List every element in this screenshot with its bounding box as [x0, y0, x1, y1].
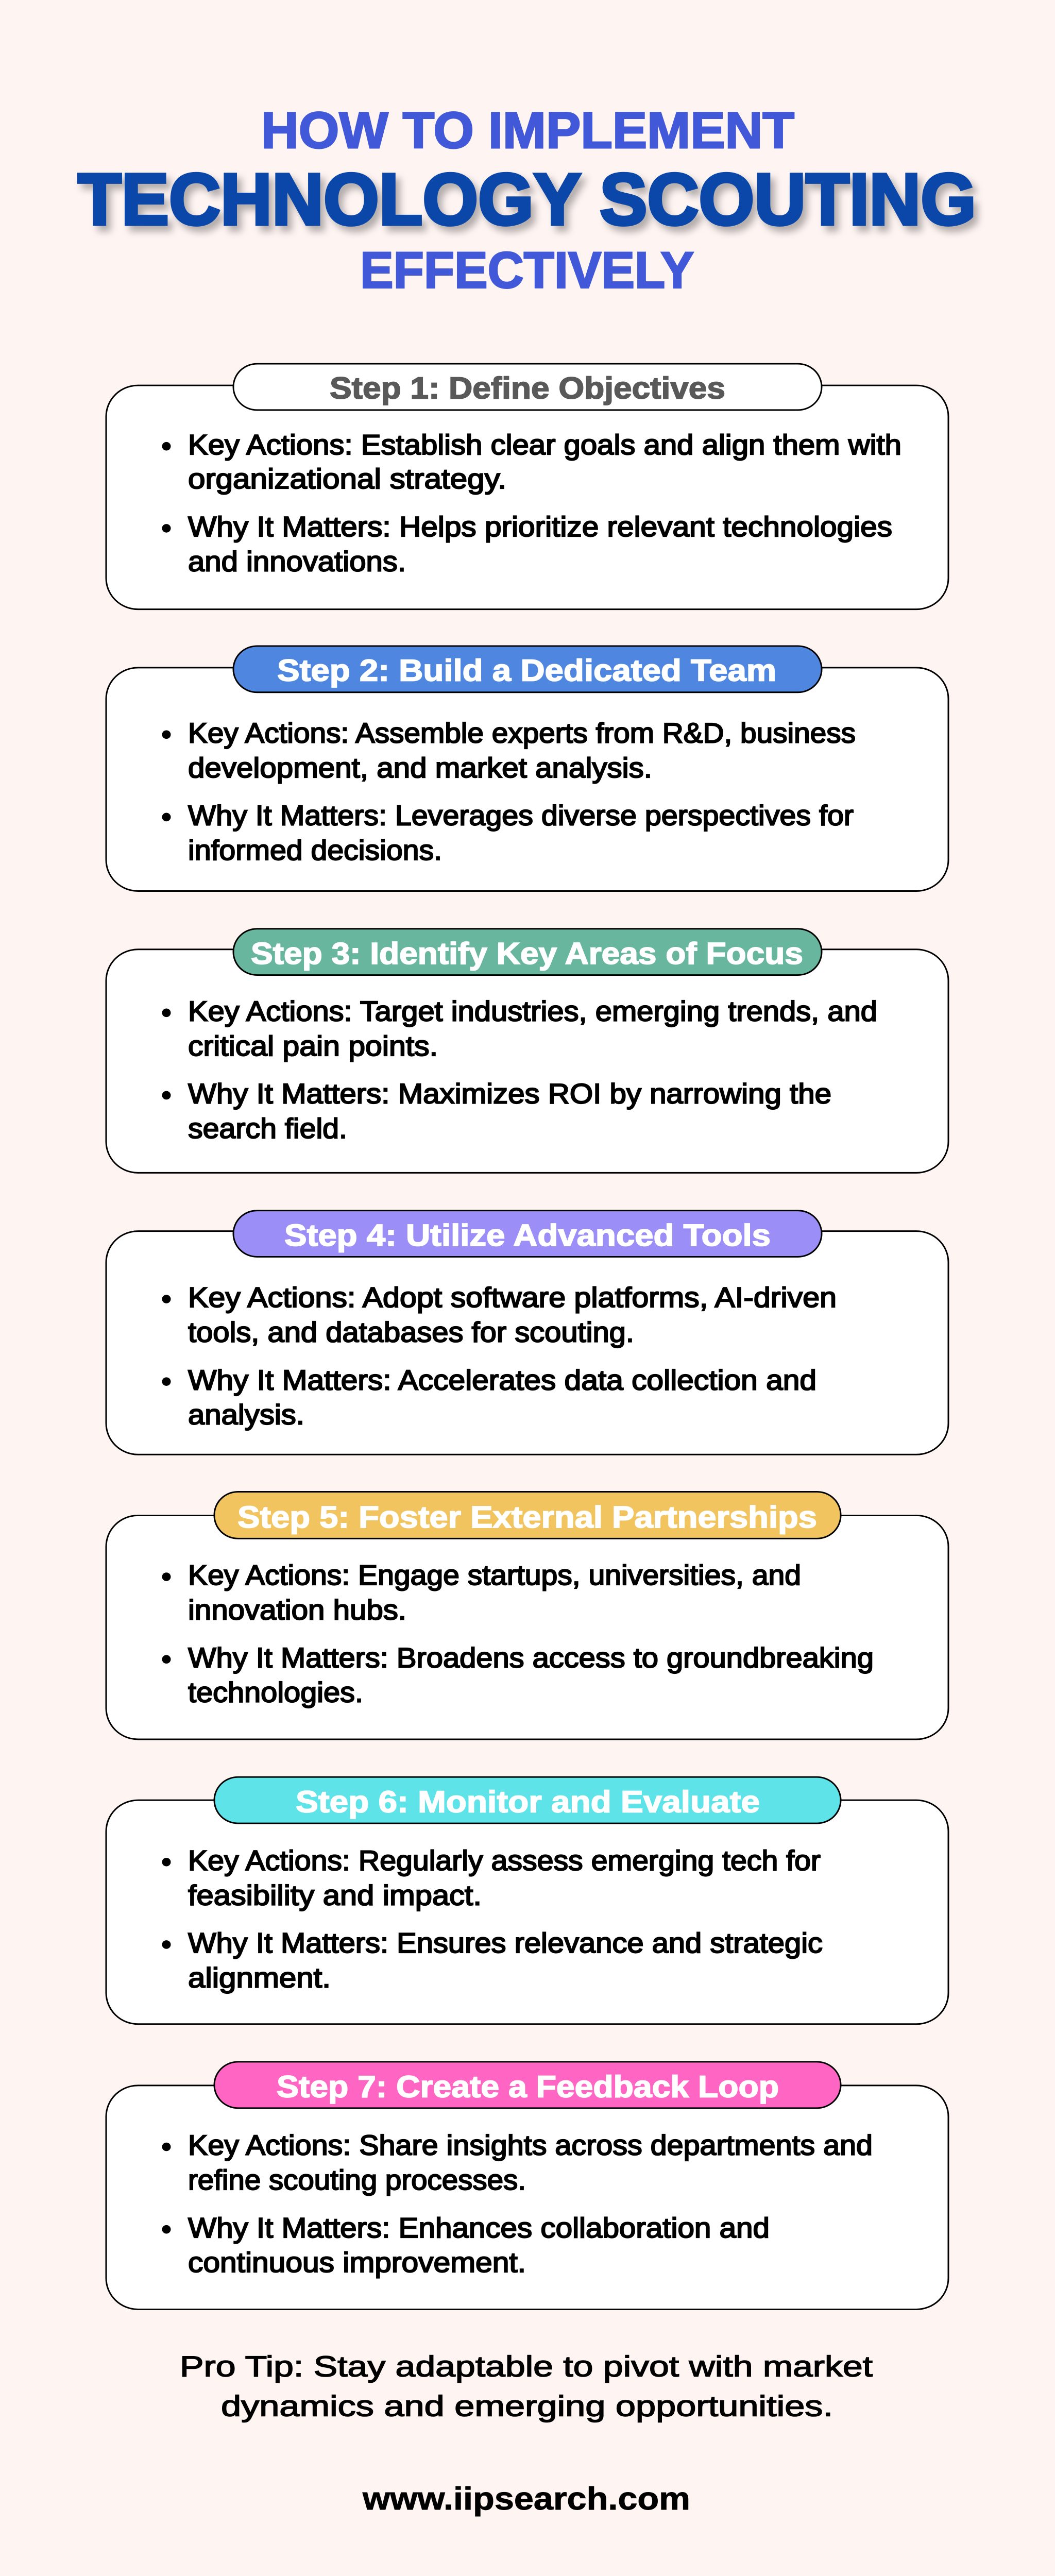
step 2 key actions — [162, 717, 856, 784]
step 2 why it matters: informed decisions. — [188, 835, 442, 866]
step 3 heading pill — [233, 929, 822, 975]
step 4 key actions: tools, and databases for scouting. — [188, 1316, 634, 1348]
step 6 why it matters: alignment. — [188, 1962, 331, 1993]
title line 2: TECHNOLOGY SCOUTING — [78, 159, 976, 240]
panel: step 3 — [106, 929, 948, 1173]
website: www.iipsearch.com — [362, 2481, 690, 2517]
step 2 why it matters: Why It Matters: Leverages diverse perspectives for — [188, 800, 854, 831]
step 4 heading: Step 4: Utilize Advanced Tools — [284, 1218, 771, 1252]
step 7 heading: Step 7: Create a Feedback Loop — [277, 2069, 779, 2104]
step 5 key actions: Key Actions: Engage startups, universities, and — [188, 1560, 801, 1591]
step 7 key actions: Key Actions: Share insights across departments and — [188, 2129, 873, 2161]
step 7 why it matters: continuous improvement. — [188, 2247, 526, 2278]
step 3 why it matters: search field. — [188, 1113, 347, 1144]
step 3 why it matters: Why It Matters: Maximizes ROI by narrowing the — [188, 1078, 831, 1109]
step 7 key actions — [162, 2129, 873, 2196]
step 4 why it matters: Why It Matters: Accelerates data collection and — [188, 1364, 816, 1396]
step 5 why it matters — [162, 1642, 874, 1708]
step 6 heading pill — [214, 1777, 841, 1823]
step 6 heading: Step 6: Monitor and Evaluate — [296, 1784, 760, 1819]
panel: step 7 — [106, 2062, 948, 2309]
step 2 key actions: development, and market analysis. — [188, 752, 652, 784]
step 6 key actions: feasibility and impact. — [188, 1879, 482, 1911]
step 2 key actions: Key Actions: Assemble experts from R&D, business — [188, 717, 856, 749]
step 2 why it matters — [162, 800, 854, 866]
step 4 why it matters — [162, 1364, 816, 1431]
step 6 why it matters: Why It Matters: Ensures relevance and strategic — [188, 1927, 823, 1959]
panel: step 2 — [106, 646, 948, 891]
step 1 why it matters: and innovations. — [188, 546, 406, 577]
step 1 key actions — [162, 429, 901, 495]
step 1 heading: Step 1: Define Objectives — [330, 370, 725, 405]
step 1 key actions: Key Actions: Establish clear goals and align them with — [188, 429, 901, 461]
step 4 heading pill — [233, 1211, 822, 1257]
step 6 key actions: Key Actions: Regularly assess emerging tech for — [188, 1844, 821, 1876]
step 1 heading pill — [233, 364, 822, 410]
step 5 key actions: innovation hubs. — [188, 1594, 406, 1625]
step 1 why it matters: Why It Matters: Helps prioritize relevant technologies — [188, 511, 892, 543]
step 7 why it matters: Why It Matters: Enhances collaboration and — [188, 2212, 770, 2244]
panel: step 1 — [106, 364, 948, 609]
step 5 heading pill — [214, 1492, 841, 1538]
step 5 heading: Step 5: Foster External Partnerships — [237, 1499, 817, 1534]
step 7 heading pill — [214, 2062, 841, 2108]
step 3 why it matters — [162, 1078, 831, 1144]
step 3 key actions: critical pain points. — [188, 1030, 438, 1062]
step 6 key actions — [162, 1844, 821, 1911]
step 1 key actions: organizational strategy. — [188, 463, 506, 495]
pro tip: dynamics and emerging opportunities. — [221, 2390, 833, 2422]
panel: step 5 — [106, 1492, 948, 1739]
step 2 heading pill — [233, 646, 822, 692]
step 3 heading: Step 3: Identify Key Areas of Focus — [251, 936, 803, 971]
step 3 key actions: Key Actions: Target industries, emerging trends, and — [188, 995, 877, 1027]
step 4 why it matters: analysis. — [188, 1399, 304, 1431]
step 5 why it matters: technologies. — [188, 1676, 363, 1708]
panel: step 6 — [106, 1777, 948, 2024]
step 4 key actions — [162, 1282, 837, 1348]
panel: step 4 — [106, 1211, 948, 1454]
step 2 heading: Step 2: Build a Dedicated Team — [277, 653, 776, 687]
step 1 why it matters — [162, 511, 892, 577]
step 3 key actions — [162, 995, 877, 1062]
step 6 why it matters — [162, 1927, 823, 1993]
step 7 key actions: refine scouting processes. — [188, 2164, 526, 2196]
title line 3: EFFECTIVELY — [360, 242, 694, 299]
pro tip — [180, 2350, 873, 2422]
pro tip: Pro Tip: Stay adaptable to pivot with market — [180, 2350, 873, 2383]
title line 1: HOW TO IMPLEMENT — [261, 102, 794, 159]
step 4 key actions: Key Actions: Adopt software platforms, AI-driven — [188, 1282, 837, 1313]
step 5 key actions — [162, 1560, 801, 1625]
step 7 why it matters — [162, 2212, 770, 2278]
title — [78, 102, 976, 299]
step 5 why it matters: Why It Matters: Broadens access to groundbreaking — [188, 1642, 874, 1673]
